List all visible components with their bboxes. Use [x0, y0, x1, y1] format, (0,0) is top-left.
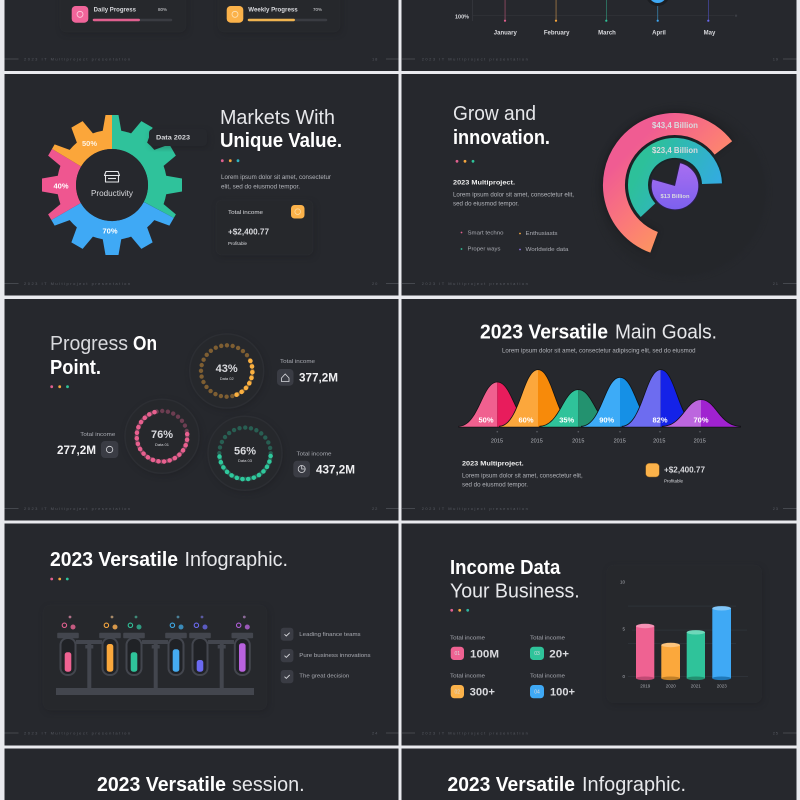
year axis [491, 431, 706, 445]
title: 2023 Versatile [448, 774, 575, 796]
y axis labels [620, 580, 625, 679]
checklist [281, 628, 371, 683]
description: sed do eiusmod tempor. [453, 202, 519, 208]
slide 23: main goals [402, 299, 796, 520]
title: Infographic. [184, 549, 288, 571]
ring: 56 percent [208, 416, 282, 490]
x axis labels: 2021 [691, 684, 701, 688]
title: 2023 Versatile [97, 774, 226, 796]
stat: 377,2M [277, 359, 338, 386]
heading [453, 103, 550, 149]
icon: store [104, 172, 120, 182]
stat 02 [450, 673, 495, 699]
title: Infographic. [582, 774, 686, 796]
bar 2020 [661, 643, 680, 680]
footer [402, 730, 796, 736]
bell curve chart: 82% [652, 416, 668, 424]
heading: Grow and [453, 103, 536, 125]
income card: Total income [228, 210, 263, 216]
stat: 377,2M: 377,2M [299, 373, 338, 385]
concentric arc chart: $43,4 Billion [652, 121, 698, 130]
panel: weekly progress: 70% [313, 7, 322, 12]
description: Lorem ipsum dolor sit amet, consectetur elit, [453, 192, 574, 198]
description [221, 175, 331, 190]
accent dots [50, 578, 69, 580]
slide 27: versatile infographic (cropped) [402, 748, 796, 800]
test tube 3 [123, 616, 145, 675]
accent dots [450, 609, 469, 612]
month labels: May [704, 30, 716, 36]
bell curve chart: 50% [478, 416, 494, 424]
description: 2023 Multiproject. [462, 460, 524, 467]
x axis labels [640, 684, 727, 688]
accent dots [221, 159, 239, 162]
title [97, 774, 305, 796]
legend: Enthusiasts [526, 231, 558, 237]
x axis labels: 2020 [666, 684, 676, 688]
stat 03 [530, 635, 569, 660]
heading: On [133, 333, 157, 355]
slide 21: grow and innovation [402, 74, 796, 296]
subtitle: Lorem ipsum dolor sit amet, consectetur adipiscing elit, sed do eiusmod [502, 348, 696, 354]
bell curve chart: 60% [518, 416, 534, 424]
stat: 377,2M: Total income [280, 359, 315, 365]
ring: 76 percent: Data 01 [155, 442, 170, 447]
heading [450, 557, 580, 602]
panel: bar chart [607, 565, 762, 703]
ring: 76 percent: 76% [151, 429, 173, 441]
gear chart: 70% [102, 226, 118, 236]
panel: daily progress [60, 0, 186, 32]
panel: weekly progress: Weekly Progress [248, 8, 298, 14]
footer: 2023 IT Multiproject presentation [24, 56, 131, 62]
ring: 56 percent: Data 03 [238, 458, 253, 463]
month labels [494, 30, 716, 36]
footer: 2023 IT Multiproject presentation [422, 281, 529, 286]
ring: 43 percent: 43% [216, 363, 238, 375]
april bubble [646, 0, 670, 6]
heading [50, 333, 157, 379]
checklist: The great decision [299, 674, 349, 680]
test tube 1 [57, 616, 79, 675]
axis label: 100% [455, 14, 469, 20]
year axis: 2015 [653, 439, 665, 445]
stat 03: 03 [534, 651, 540, 657]
title [480, 321, 717, 343]
income card: Profitable [228, 241, 248, 246]
stat 01 [450, 635, 499, 660]
title: session. [232, 774, 305, 796]
description: Lorem ipsum dolor sit amet, consectetur [221, 175, 331, 181]
bell curve chart [458, 370, 741, 427]
title [448, 774, 686, 796]
test tube 4 [165, 616, 187, 675]
bar 2023 [712, 606, 731, 680]
concentric arc chart: $13 Billion [660, 194, 690, 200]
ring: 76 percent [125, 399, 199, 473]
income card [216, 200, 313, 255]
footer: 2023 IT Multiproject presentation [422, 506, 529, 511]
stat 04: 100+ [550, 687, 575, 699]
title: Main Goals. [615, 321, 717, 343]
footer: 24 [372, 730, 378, 736]
gear chart: Productivity [91, 189, 133, 198]
grid lines [628, 606, 748, 677]
footer [4, 56, 398, 62]
footer [4, 281, 398, 286]
slide 24: versatile infographic test tubes [4, 524, 398, 746]
stat: 277,2M: Total income [80, 432, 115, 438]
description: sed do eiusmod tempor. [462, 482, 528, 488]
stat 02: 02 [455, 689, 460, 695]
year axis: 2015 [491, 439, 503, 445]
month labels: January [494, 30, 517, 36]
x axis labels: 2019 [640, 684, 651, 688]
concentric arc chart [598, 108, 766, 276]
panel: daily progress: Daily Progress [94, 8, 137, 14]
footer: 2023 IT Multiproject presentation [24, 281, 131, 286]
stat 04: Total income [530, 673, 565, 679]
checklist: Pure business innovations [299, 653, 371, 659]
test tube 2 [99, 616, 121, 675]
ring: 43 percent [190, 334, 264, 408]
data tag: Data 2023 [156, 134, 190, 142]
heading: Unique Value. [220, 130, 342, 152]
slide 19: monthly chart (cropped) [402, 0, 796, 71]
description [462, 460, 583, 488]
title [50, 549, 288, 571]
footer: 22 [372, 506, 378, 511]
footer: 2023 IT Multiproject presentation [422, 730, 529, 736]
footer: 20 [372, 281, 378, 286]
gear chart [52, 125, 172, 245]
income stat [646, 463, 705, 484]
slide 25: income data [402, 524, 796, 746]
legend: Worldwide data [526, 247, 570, 253]
bell curve chart: 70% [693, 416, 709, 424]
panel: test tube rack [43, 605, 267, 710]
ring: 56 percent: 56% [234, 446, 256, 458]
income card: +$2,400.77 [228, 227, 269, 237]
month labels: March [598, 30, 616, 36]
income stat: Profitable [664, 479, 684, 484]
stat 03: Total income [530, 635, 565, 641]
bar 2021 [687, 630, 705, 680]
stat 04 [530, 673, 575, 699]
accent dots [50, 385, 69, 388]
data tag [149, 129, 207, 146]
footer [402, 56, 796, 62]
footer: 19 [773, 56, 779, 62]
heading: Income Data [450, 557, 561, 579]
legend: Proper ways [468, 246, 501, 252]
panel: weekly progress [218, 0, 340, 32]
footer: 25 [773, 730, 779, 736]
gear chart: 50% [82, 139, 97, 148]
stat 01: Total income [450, 635, 485, 641]
heading [220, 107, 342, 152]
stat 02: 300+ [470, 687, 495, 699]
description [453, 179, 574, 208]
y axis labels: 0 [622, 674, 625, 679]
concentric arc chart: $23,4 Billion [652, 146, 698, 155]
description: elit, sed do eiusmod tempor. [221, 184, 300, 190]
footer [4, 730, 398, 736]
bell curve chart: 35% [559, 416, 575, 424]
footer: 2023 IT Multiproject presentation [422, 56, 529, 62]
stat: 437,2M [293, 451, 355, 477]
stat: 277,2M [57, 432, 118, 458]
heading: Your Business. [450, 580, 580, 602]
ring: 43 percent: Data 02 [220, 376, 234, 381]
stat: 437,2M: 437,2M [316, 464, 355, 476]
footer: 23 [773, 506, 779, 511]
bell curve chart: 90% [599, 416, 615, 424]
stat 02: Total income [450, 673, 485, 679]
footer: 18 [372, 56, 378, 62]
title: 2023 Versatile [50, 549, 178, 571]
slide 22: progress on point [4, 299, 398, 520]
footer [4, 506, 398, 511]
bar 2019 [636, 624, 654, 680]
description: 2023 Multiproject. [453, 179, 515, 186]
heading: innovation. [453, 127, 550, 149]
year axis: 2015 [572, 439, 584, 445]
footer [402, 506, 796, 511]
title: 2023 Versatile [480, 321, 608, 343]
stat 01: 01 [455, 651, 460, 657]
stat 01: 100M [470, 648, 499, 660]
heading: Point. [50, 357, 101, 379]
rack frame [56, 640, 254, 695]
legend: Smart techno [468, 230, 504, 236]
legend [461, 230, 570, 253]
stat 03: 20+ [549, 648, 569, 660]
year axis: 2015 [694, 439, 706, 445]
slide 20: markets with unique value [4, 74, 398, 296]
gear chart: 40% [53, 182, 69, 190]
test tube 5 [189, 616, 211, 675]
heading: Progress [50, 333, 128, 355]
y axis labels: 5 [622, 626, 625, 632]
stat: 437,2M: Total income [296, 451, 332, 457]
slide 18: daily progress (cropped) [4, 0, 398, 71]
month labels: April [652, 30, 666, 36]
year axis: 2015 [614, 439, 626, 445]
chart axes and month stems [472, 0, 737, 22]
slide 26: versatile session (cropped) [4, 748, 398, 800]
footer [402, 281, 796, 286]
year axis: 2015 [531, 439, 543, 445]
footer: 21 [773, 281, 779, 286]
x axis labels: 2023 [717, 684, 727, 688]
panel: daily progress: 80% [158, 7, 167, 12]
month labels: February [544, 30, 570, 36]
footer: 2023 IT Multiproject presentation [24, 506, 131, 511]
income stat: +$2,400.77 [664, 465, 705, 475]
footer: 2023 IT Multiproject presentation [24, 730, 131, 736]
description: Lorem ipsum dolor sit amet, consectetur elit, [462, 474, 583, 480]
stat 04: 04 [534, 689, 540, 695]
heading: Markets With [220, 107, 335, 129]
stat: 277,2M: 277,2M [57, 445, 96, 457]
test tube 6 [232, 616, 253, 675]
accent dots [456, 160, 474, 163]
y axis labels: 10 [620, 580, 625, 584]
checklist: Leading finance teams [299, 632, 361, 638]
